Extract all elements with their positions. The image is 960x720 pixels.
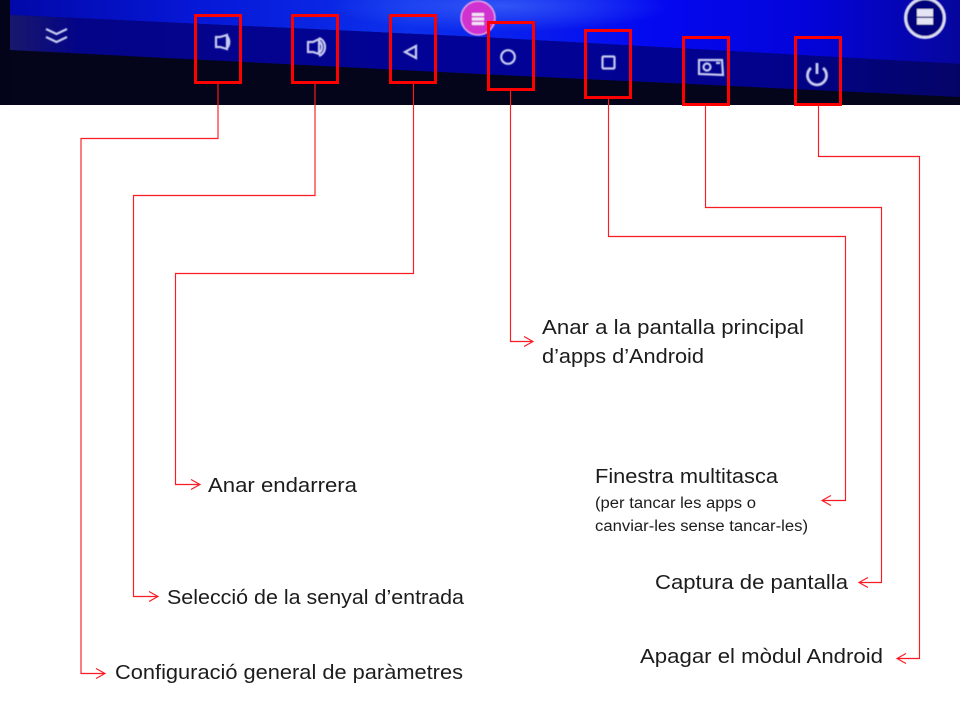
icon: volume up: [308, 38, 325, 56]
arrow: power off: [818, 106, 920, 664]
highlight box: volume down: [196, 16, 240, 82]
label: screenshot: Captura de pantalla: [655, 571, 849, 594]
icon: back triangle: [405, 46, 416, 58]
icon: recents square: [602, 56, 614, 68]
icon: floating menu button: [461, 1, 495, 35]
arrow: screenshot: [706, 106, 882, 588]
label: multitask window: canviar-les sense tancar-les): [595, 518, 808, 535]
label: home screen: [542, 316, 804, 368]
label: home screen: d’apps d’Android: [542, 345, 704, 368]
highlight box: screenshot: [684, 38, 728, 104]
highlight box: volume up: [292, 16, 338, 82]
label: back: Anar endarrera: [208, 474, 358, 497]
photo: Android toolbar strip: [0, 0, 960, 105]
label: multitask window: [595, 465, 808, 535]
label: home screen: Anar a la pantalla principal: [542, 316, 804, 339]
label: multitask window: Finestra multitasca: [595, 465, 779, 488]
icon: corner menu button: [906, 0, 944, 38]
arrow: multitask: [608, 99, 846, 506]
icon: home circle: [501, 50, 515, 64]
highlight box: power: [796, 38, 840, 104]
highlight box: recents: [586, 30, 630, 98]
arrow: home screen: [510, 91, 533, 346]
icon: double chevron: [46, 29, 67, 42]
label: general settings: Configuració general de paràmetres: [115, 661, 463, 684]
label: multitask window: (per tancar les apps o: [595, 495, 756, 512]
highlight box: back: [390, 16, 436, 82]
arrow: general settings: [81, 84, 218, 678]
label: input signal: Selecció de la senyal d’entrada: [167, 586, 465, 609]
label: power off: Apagar el mòdul Android: [640, 645, 883, 668]
arrow: back: [176, 84, 414, 490]
icon: power: [808, 63, 826, 85]
icon: screenshot camera: [699, 60, 723, 75]
icon: volume down: [216, 35, 229, 49]
highlight box: home: [488, 22, 534, 90]
arrow: input signal: [134, 84, 315, 602]
